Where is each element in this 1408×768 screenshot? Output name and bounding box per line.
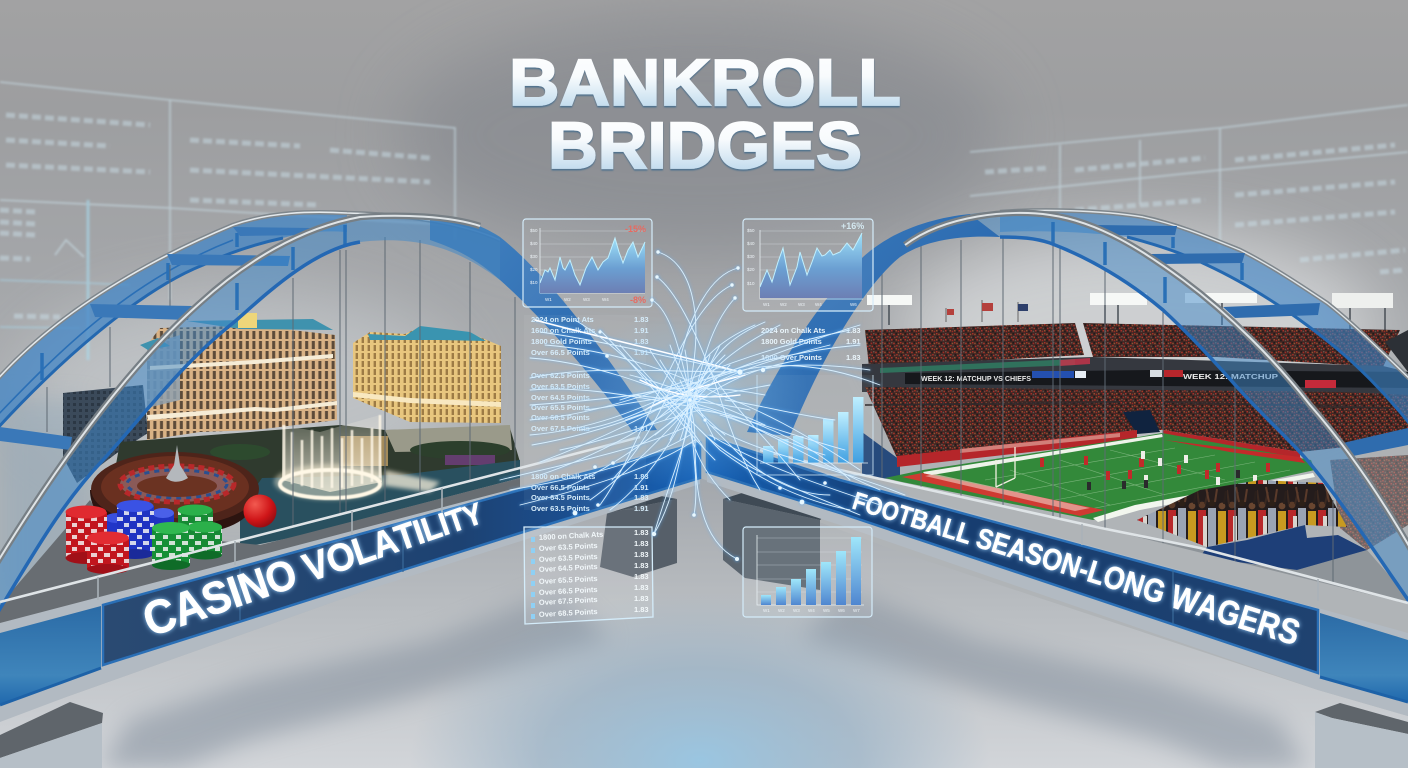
- right bridge crossbars: [1097, 225, 1408, 457]
- floor: [0, 478, 1408, 768]
- central chart panel top left: W2: [564, 297, 571, 302]
- scoreboard band: WEEK 12: MATCHUP VS CHIEFS: [921, 374, 1031, 383]
- odds table panel lower left: 1.83: [634, 550, 649, 559]
- odds table panel lower left: Over 63.5 Points: [539, 541, 598, 553]
- bar chart panel lower right: W3: [793, 608, 800, 613]
- fountain: [274, 415, 440, 500]
- right bridge back arch: [1000, 210, 1408, 428]
- left odds rows: 1.91: [634, 348, 649, 357]
- stadium light towers: [867, 293, 1393, 330]
- left odds rows: Over 66.5 Points: [531, 483, 590, 492]
- faint dashboard left: [0, 82, 455, 360]
- left odds rows: Over 65.5 Points: [531, 403, 590, 412]
- right odds rows: 1.83: [846, 326, 861, 335]
- left bridge back arch: [0, 212, 500, 431]
- red ad walls: [897, 430, 1300, 467]
- central chart panel top right: $50: [747, 228, 755, 233]
- bar chart panel lower right: W1: [763, 608, 770, 613]
- left odds rows: [524, 315, 649, 513]
- odds table panel lower left: Over 64.5 Points: [539, 562, 598, 574]
- pedestal right: [1315, 703, 1408, 768]
- bar chart panel lower right: W2: [778, 608, 785, 613]
- central chart panel top left: $40: [530, 241, 538, 246]
- dark building: [63, 385, 148, 483]
- left rail: [0, 437, 640, 602]
- fan stand wall: [1200, 525, 1367, 570]
- left odds rows: Over 66.5 Points: [531, 348, 590, 357]
- left odds rows: 1.91: [634, 483, 649, 492]
- bar chart panel lower right: W6: [838, 608, 845, 613]
- central chart panel top right: $30: [747, 254, 755, 259]
- central chart panel top right: +16%: [841, 221, 864, 231]
- right odds rows: [761, 326, 861, 362]
- title line two: BRIDGES: [548, 108, 862, 182]
- title line one: BANKROLL: [509, 45, 901, 119]
- odds table panel lower left: Over 65.5 Points: [539, 574, 598, 586]
- lower stands: [862, 387, 1408, 480]
- odds table panel lower left: 1.83: [634, 583, 649, 592]
- left odds rows: 1.83: [634, 315, 649, 324]
- central chart panel top left: -15%: [625, 224, 646, 234]
- left odds rows: 1600 on Chalk Ats: [531, 326, 595, 335]
- left banner: [103, 443, 700, 665]
- right odds rows: 1.91: [846, 337, 861, 346]
- central chart panel top left: W3: [583, 297, 590, 302]
- left odds rows: Over 63.5 Points: [531, 504, 590, 513]
- central chart panel top left: $50: [530, 228, 538, 233]
- floor pillar left: [590, 494, 677, 577]
- red chip stack front: [87, 532, 129, 574]
- roulette wheel: [90, 445, 259, 535]
- right glass panel: [1320, 613, 1408, 702]
- central chart panel top right: W4: [815, 302, 822, 307]
- odds table panel lower left: 1800 on Chalk Ats: [539, 530, 603, 542]
- bar chart panel lower right: W5: [823, 608, 830, 613]
- left odds rows: Over 63.5 Points: [531, 382, 590, 391]
- Bellagio tower left: [140, 313, 337, 440]
- right odds rows: 1800 Gold Points: [761, 337, 822, 346]
- central chart panel top left: -8%: [630, 295, 646, 305]
- left odds rows: 1.83: [634, 493, 649, 502]
- left odds rows: 1.83: [634, 472, 649, 481]
- center glow: [570, 310, 810, 490]
- odds table panel lower left: Over 63.5 Points: [539, 552, 598, 564]
- central chart panel top right: W6: [850, 302, 857, 307]
- right stadium scene: [862, 293, 1408, 606]
- deck floor right: [1130, 535, 1408, 604]
- central chart panel top right: [743, 219, 873, 311]
- right bridge hangers: [882, 237, 1333, 584]
- left deck silver trim: [0, 440, 700, 722]
- left bridge front arch: [0, 215, 657, 617]
- central chart panel top left: [523, 219, 652, 307]
- football season-long wagers label: FOOTBALL SEASON-LONG WAGERS: [849, 477, 1305, 653]
- central chart panel top right: $20: [747, 267, 755, 272]
- left odds rows: 1.83: [634, 337, 649, 346]
- left odds rows: 1.91: [634, 326, 649, 335]
- left bridge crossbars: [0, 227, 310, 450]
- scoreboard band: [862, 357, 1408, 395]
- faint dashboard right: [970, 105, 1408, 272]
- right odds rows: 1.83: [846, 353, 861, 362]
- left bridge hangers: [47, 237, 515, 526]
- deck floor: [0, 478, 520, 625]
- right rail: [760, 450, 1408, 603]
- scoreboard band: WEEK 12: MATCHUP: [1183, 372, 1278, 381]
- odds table panel lower left: 1.83: [634, 528, 649, 537]
- odds table panel lower left: Over 66.5 Points: [539, 585, 598, 597]
- red ball: [244, 494, 276, 528]
- central chart panel top left: $30: [530, 254, 538, 259]
- goal post: [996, 447, 1015, 487]
- left odds rows: 1.91: [634, 424, 649, 433]
- left odds rows: 1800 Gold Points: [531, 337, 592, 346]
- green chip stacks: [152, 504, 222, 570]
- casino volatility label: CASINO VOLATILITY: [136, 482, 488, 647]
- bar chart panel lower right: W4: [808, 608, 815, 613]
- odds table panel lower left: 1.83: [634, 561, 649, 570]
- pedestal left: [0, 702, 103, 768]
- left odds rows: Over 62.5 Points: [531, 371, 590, 380]
- left odds rows: Over 67.5 Points: [531, 424, 590, 433]
- floor pillar right: [723, 492, 830, 590]
- odds table panel lower left: 1.83: [634, 594, 649, 603]
- left odds rows: Over 66.5 Points: [531, 413, 590, 422]
- odds table panel lower left: Over 68.5 Points: [539, 607, 598, 619]
- central chart panel top left: $10: [530, 280, 538, 285]
- blue chips back: [105, 508, 174, 546]
- left glass panel: [0, 606, 101, 705]
- bar chart panel lower right: [743, 527, 872, 617]
- Bellagio tower right: [353, 326, 501, 423]
- left odds rows: 1.91: [634, 504, 649, 513]
- right deck: [707, 434, 1408, 716]
- odds table panel lower left: [524, 527, 653, 624]
- odds table panel lower left: Over 67.5 Points: [539, 595, 598, 607]
- players: [1040, 451, 1270, 490]
- right side crowd: [1330, 455, 1408, 550]
- trees and ground: [115, 425, 520, 490]
- right odds rows: 2024 on Chalk Ats: [761, 326, 825, 335]
- left odds rows: 1800 on Chalk Ats: [531, 472, 595, 481]
- left casino scene: [0, 313, 520, 625]
- left bridge back struts: [42, 233, 237, 380]
- upper stands: [865, 323, 1408, 372]
- central chart panel top right: W3: [798, 302, 805, 307]
- left deck: [0, 437, 700, 722]
- central chart panel top right: W2: [780, 302, 787, 307]
- flags: [946, 300, 1028, 322]
- blue chip stack: [116, 500, 154, 559]
- odds table panel lower left: 1.83: [634, 605, 649, 614]
- left odds rows: Over 64.5 Points: [531, 493, 590, 502]
- right odds rows: 1600 Over Points: [761, 353, 822, 362]
- right bridge front arch: [747, 211, 1408, 607]
- central chart panel top right: W1: [763, 302, 770, 307]
- bar chart panel lower right: W7: [853, 608, 860, 613]
- odds table panel lower left: 1.83: [634, 572, 649, 581]
- central chart panel top right: $40: [747, 241, 755, 246]
- odds table panel lower left: 1.83: [634, 539, 649, 548]
- central chart panel top left: W4: [602, 297, 609, 302]
- left odds rows: 2024 on Point Ats: [531, 315, 594, 324]
- data flow network: [500, 252, 905, 559]
- right deck silver trim: [707, 434, 1408, 716]
- football field: [885, 433, 1315, 522]
- foreground fans: [1137, 480, 1347, 547]
- pool water: [240, 460, 520, 548]
- right banner: [707, 437, 1318, 673]
- left odds rows: Over 64.5 Points: [531, 393, 590, 402]
- central chart panel top left: $20: [530, 267, 538, 272]
- central chart panel top left: W1: [545, 297, 552, 302]
- bar chart panel middle right: [757, 375, 873, 475]
- central chart panel top right: $10: [747, 281, 755, 286]
- title: [509, 45, 901, 182]
- network nodes: [573, 250, 827, 561]
- red chip stack back: [66, 506, 107, 564]
